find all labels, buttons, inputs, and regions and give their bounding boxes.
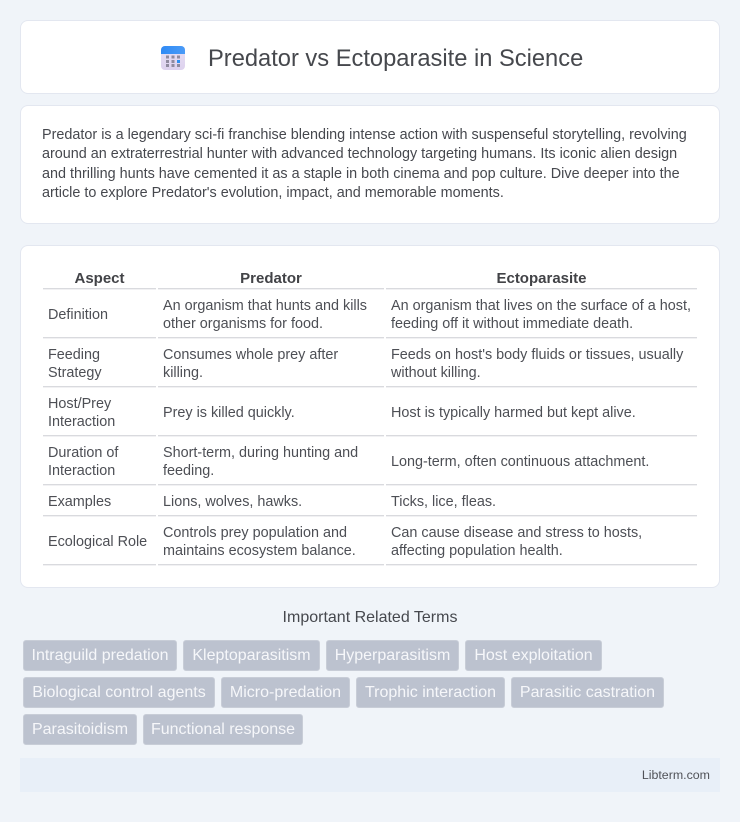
heading: related terms: Important Related Terms xyxy=(283,609,457,626)
row: Feeding Strategy: without killing. xyxy=(391,365,481,381)
related term tags: Intraguild predation xyxy=(32,647,168,664)
row: Feeding Strategy: Feeding xyxy=(48,347,100,363)
row: Duration of Interaction: Interaction xyxy=(48,463,115,479)
related term tags: Biological control agents xyxy=(32,684,206,701)
description text: and thrilling hunts have cemented it as a staple in both cinema and pop culture. Dive deeper into the xyxy=(42,166,680,182)
row: Host/Prey Interaction: Host/Prey xyxy=(48,396,111,412)
row: Examples: Examples xyxy=(48,494,111,510)
row: Ecological Role: Controls prey population and xyxy=(163,525,347,541)
title: Predator vs Ectoparasite in Science xyxy=(208,46,583,72)
table heading: Ectoparasite: Ectoparasite xyxy=(496,270,587,287)
row: Duration of Interaction: Long-term, often continuous attachment. xyxy=(391,454,649,470)
row: Host/Prey Interaction: Prey is killed quickly. xyxy=(163,405,295,421)
row: Host/Prey Interaction: Host is typically harmed but kept alive. xyxy=(391,405,636,421)
table heading: Predator: Predator xyxy=(240,270,302,287)
row: Host/Prey Interaction: Interaction xyxy=(48,414,115,430)
row: Ecological Role: Ecological Role xyxy=(48,534,147,550)
related term tags: Hyperparasitism xyxy=(335,647,450,664)
description text xyxy=(42,127,687,201)
row: Host/Prey Interaction xyxy=(48,396,636,430)
related term tags: Host exploitation xyxy=(474,647,593,664)
related term tags: Parasitic castration xyxy=(520,684,655,701)
row: Definition: An organism that hunts and kills xyxy=(163,298,367,314)
description text: article to explore Predator's evolution, impact, and memorable moments. xyxy=(42,185,504,201)
description text: Predator is a legendary sci-fi franchise blending intense action with suspenseful storytelling, revolving xyxy=(42,127,687,143)
row: Definition: An organism that lives on the surface of a host, xyxy=(391,298,691,314)
row: Ecological Role xyxy=(48,525,642,559)
related term tags: Micro-predation xyxy=(230,684,341,701)
row: Feeding Strategy: killing. xyxy=(163,365,203,381)
row: Examples xyxy=(48,494,496,510)
row: Ecological Role: Can cause disease and stress to hosts, xyxy=(391,525,642,541)
row: Feeding Strategy xyxy=(48,347,684,381)
footer credit: Libterm.com xyxy=(642,768,710,782)
panel: comparison table xyxy=(20,245,720,588)
row: Ecological Role: affecting population health. xyxy=(391,543,563,559)
row: Definition: other organisms for food. xyxy=(163,316,323,332)
related term tags: Parasitoidism xyxy=(32,721,128,738)
related term tags: Functional response xyxy=(151,721,295,738)
row: Feeding Strategy: Consumes whole prey after xyxy=(163,347,338,363)
related term tags xyxy=(23,640,664,745)
footer bar xyxy=(20,758,720,792)
row: Duration of Interaction: Duration of xyxy=(48,445,118,461)
row: Duration of Interaction: Short-term, during hunting and xyxy=(163,445,358,461)
description text: around an extraterrestrial hunter with advanced technology targeting humans. Its iconic alien design xyxy=(42,146,677,162)
row: Examples: Ticks, lice, fleas. xyxy=(391,494,496,510)
header card xyxy=(20,20,720,94)
panel: description xyxy=(20,105,720,224)
row: Definition: feeding off it without immediate death. xyxy=(391,316,633,332)
row: Duration of Interaction: feeding. xyxy=(163,463,214,479)
row: Definition xyxy=(48,298,691,332)
icon: calendar xyxy=(161,46,185,70)
row: Feeding Strategy: Feeds on host's body fluids or tissues, usually xyxy=(391,347,683,363)
row: Feeding Strategy: Strategy xyxy=(48,365,102,381)
row: Definition: Definition xyxy=(48,307,108,323)
table heading: Aspect: Aspect xyxy=(74,270,125,287)
related term tags: Kleptoparasitism xyxy=(192,647,311,664)
related term tags: Trophic interaction xyxy=(365,684,496,701)
row: Duration of Interaction xyxy=(48,445,649,479)
row: Examples: Lions, wolves, hawks. xyxy=(163,494,302,510)
row: Ecological Role: maintains ecosystem balance. xyxy=(163,543,356,559)
